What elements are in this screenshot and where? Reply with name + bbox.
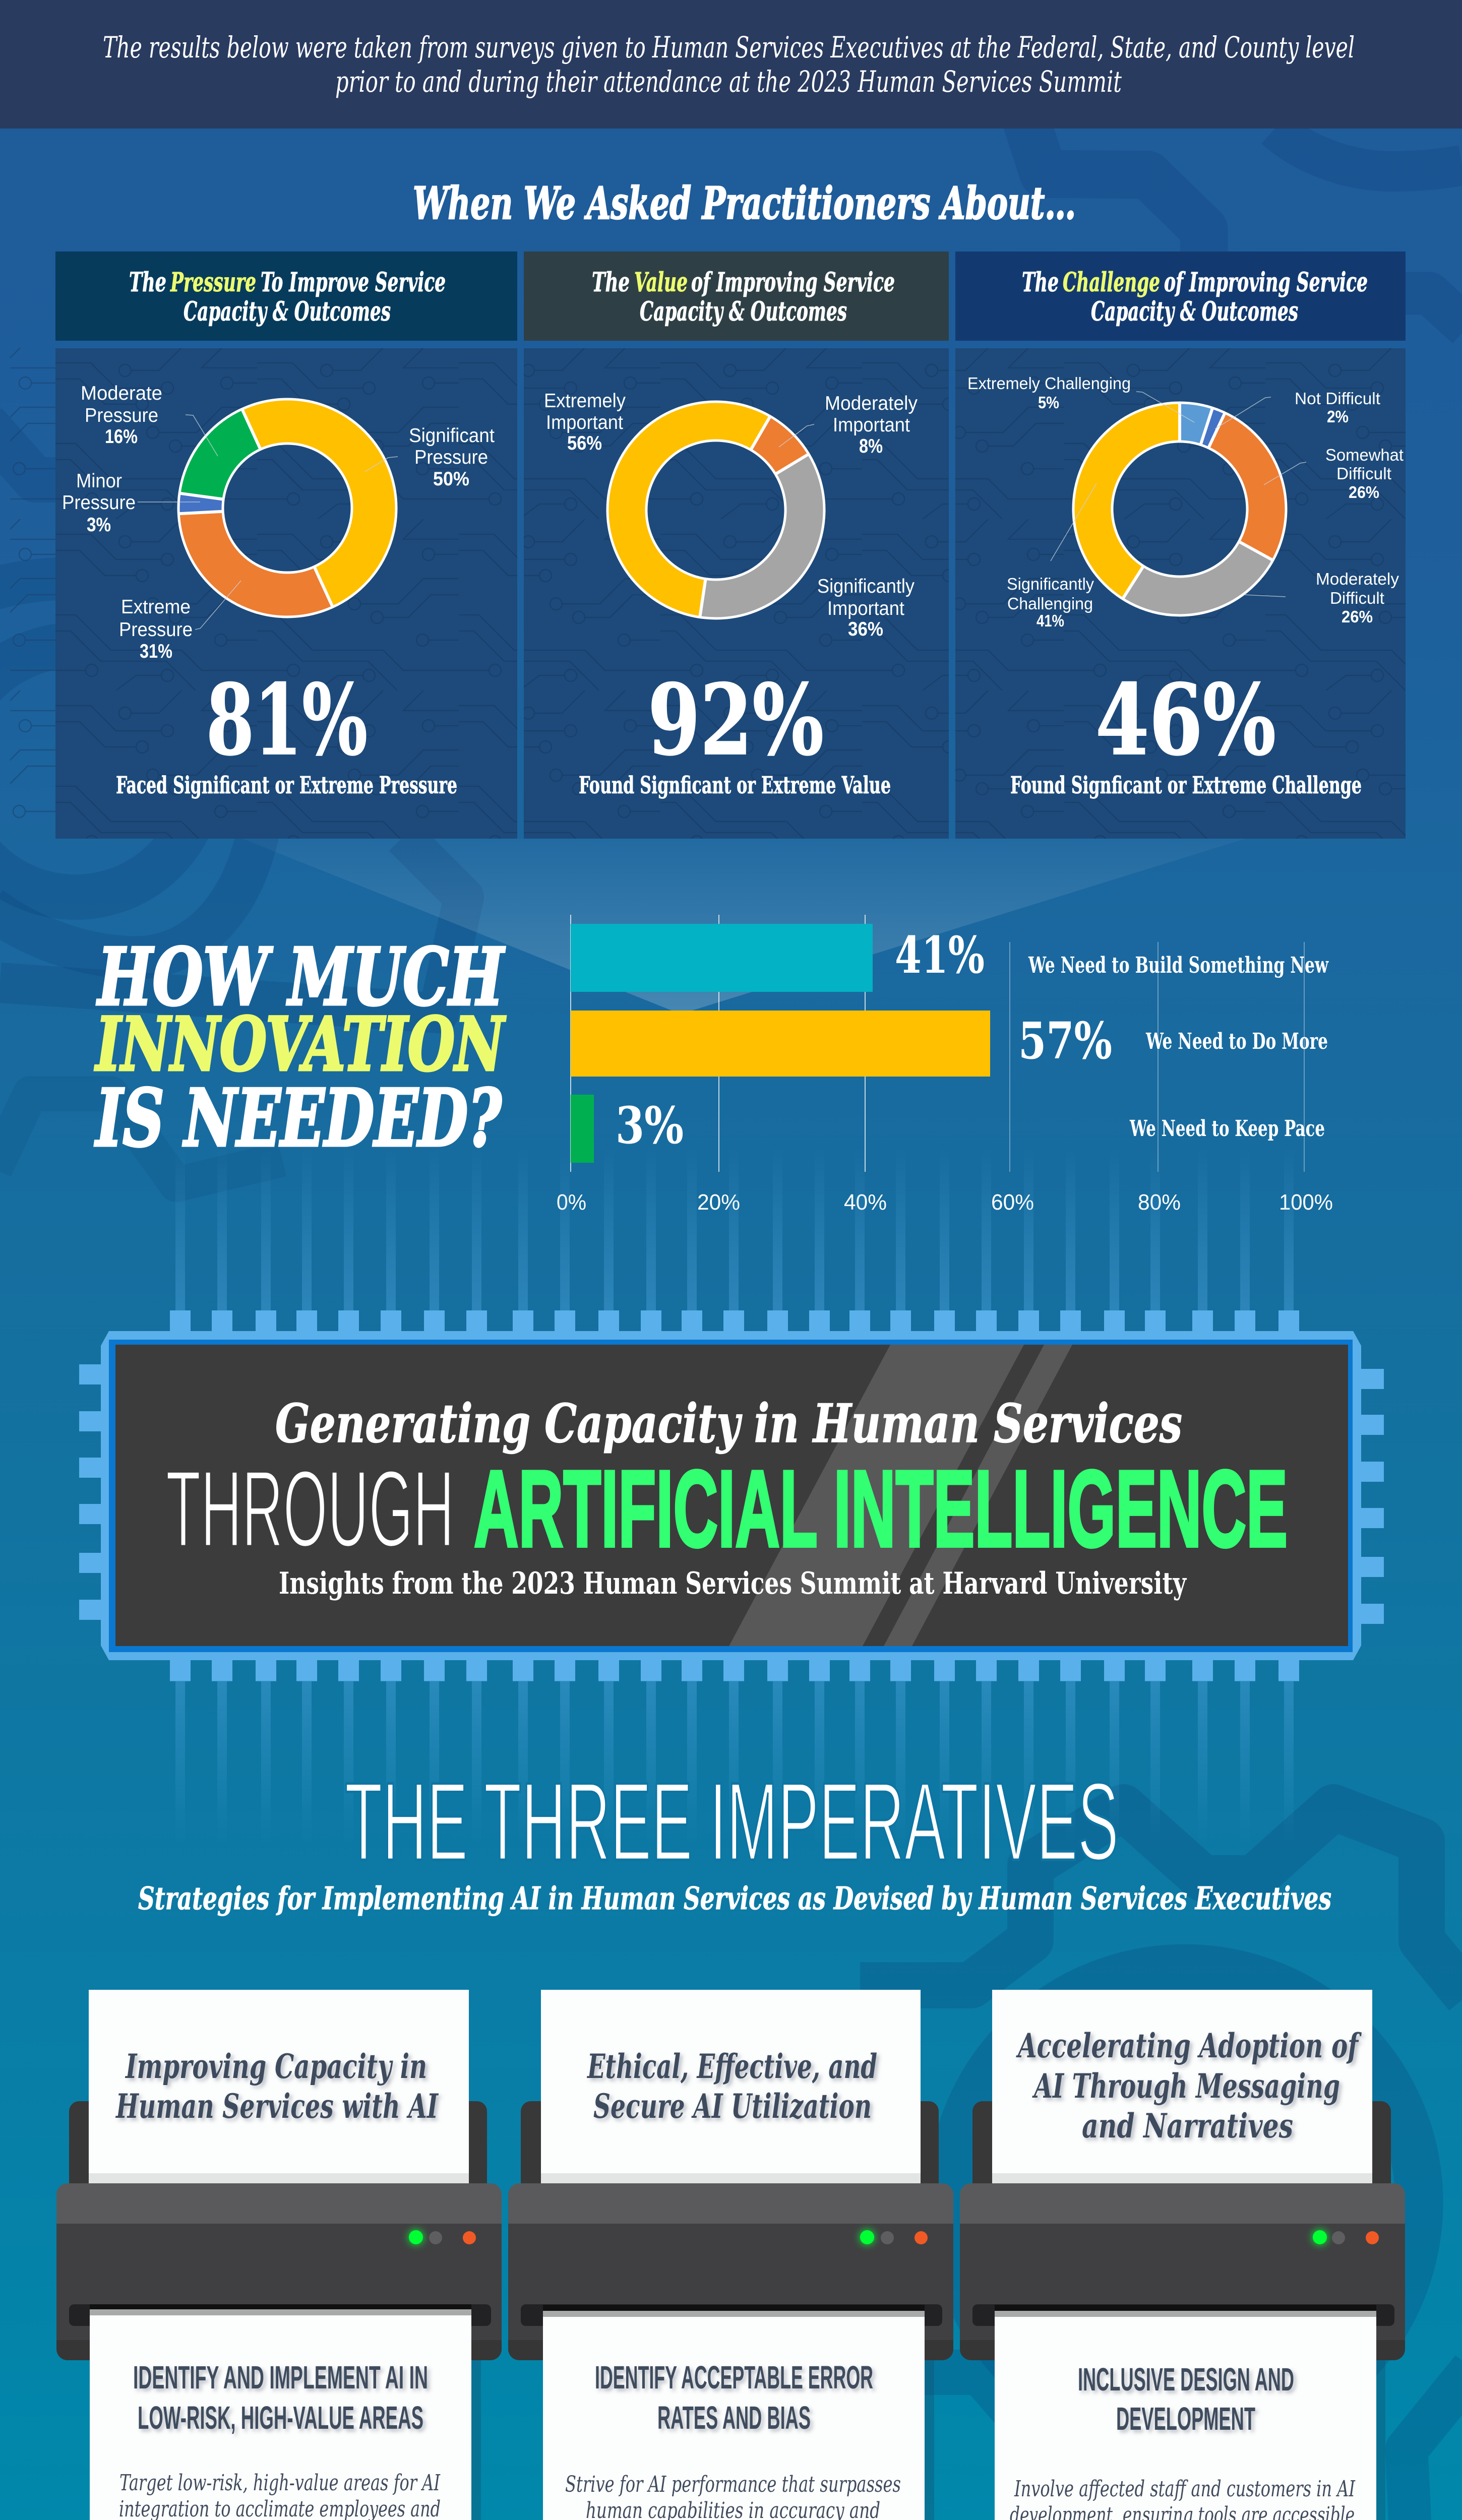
strategy: error rates: Strive for AI performance that surpasses <box>565 2472 901 2497</box>
donut labels: value: Important <box>827 598 904 619</box>
panel header: challenge: Challenge <box>1063 267 1160 298</box>
heading: how much innovation is needed <box>94 931 506 1164</box>
chip face <box>115 1345 1348 1646</box>
panel: pressure <box>55 251 517 839</box>
donut labels: pressure: 16% <box>105 426 138 448</box>
axis labels: 20% <box>697 1190 740 1215</box>
chip title lines: THROUGH <box>166 1447 454 1569</box>
donut labels: pressure: 31% <box>140 641 172 662</box>
donut labels: pressure: Pressure <box>119 619 193 641</box>
strategy: inclusive design <box>1010 2361 1360 2520</box>
strategy: error rates <box>565 2359 901 2520</box>
donut labels: pressure: Significant <box>409 425 495 447</box>
printer with input paper <box>508 1990 953 2360</box>
paper rows <box>90 2315 471 2520</box>
axis labels: 100% <box>1279 1190 1333 1215</box>
donut labels: value: 36% <box>848 618 883 640</box>
axis labels <box>557 1190 1333 1215</box>
strategy: inclusive design: DEVELOPMENT <box>1116 2401 1255 2437</box>
paper shadow <box>1000 2360 1385 2520</box>
strategy: identify low-risk areas <box>114 2359 446 2520</box>
donut labels: pressure: Pressure <box>85 405 158 426</box>
donut labels: challenge: Difficult <box>1330 589 1384 607</box>
bar: keep pace: We Need to Keep Pace <box>1129 1116 1325 1142</box>
donut labels: value: Extremely <box>544 390 626 412</box>
donut chart: value <box>594 388 838 632</box>
paper rows <box>543 2317 925 2520</box>
donut labels: pressure: Moderate <box>81 383 162 404</box>
panel header: pressure: Capacity & Outcomes <box>184 296 391 327</box>
donut labels: challenge: Somewhat <box>1325 446 1404 464</box>
paper shadow <box>96 2360 481 2520</box>
donut labels: value <box>544 390 918 640</box>
intro text <box>103 30 1355 99</box>
bar: build something new <box>571 924 1329 992</box>
bar chart: how much innovation <box>557 915 1333 1215</box>
axis labels: 60% <box>991 1190 1034 1215</box>
donut chart: pressure <box>172 393 402 623</box>
donut labels: challenge: 2% <box>1327 407 1349 426</box>
panel header: value: Value <box>634 267 688 298</box>
panel header: pressure <box>55 251 517 341</box>
title chip <box>79 1149 1384 1843</box>
panel header: pressure: To Improve Service <box>261 267 446 298</box>
printer title: Ethical, Effective, and <box>587 2047 877 2086</box>
intro text: prior to and during their attendance at the 2023 Human Services Summit <box>335 65 1122 99</box>
bar: build something new: 41% <box>895 925 985 985</box>
paper rows <box>995 2317 1376 2520</box>
donut labels: pressure: Pressure <box>62 492 136 514</box>
bar: keep pace: 3% <box>616 1096 684 1155</box>
panel header: pressure: The <box>129 267 166 298</box>
panel header: challenge: The <box>1022 267 1059 298</box>
donut labels: value: Moderately <box>825 393 918 414</box>
column 3: messaging and narratives <box>960 1990 1405 2520</box>
donut labels: challenge: Significantly <box>1007 575 1094 593</box>
chip title lines: Insights from the 2023 Human Services Summit at Harvard University <box>279 1566 1187 1601</box>
donut labels: challenge: 26% <box>1342 607 1373 626</box>
strategy: inclusive design: INCLUSIVE DESIGN AND <box>1078 2361 1294 2398</box>
donut labels: value: Important <box>833 414 910 436</box>
panel header: value: of Improving Service <box>691 267 895 298</box>
donut labels: pressure: Pressure <box>414 447 488 468</box>
donut labels: pressure: Minor <box>76 470 122 492</box>
chip title lines: Generating Capacity in Human Services <box>275 1392 1182 1455</box>
donut labels: challenge: Challenging <box>1007 594 1093 613</box>
chip connector lines fading <box>175 1149 1294 1843</box>
printer with input paper <box>960 1990 1405 2360</box>
donut labels: value: Significantly <box>817 576 915 597</box>
chip title lines <box>166 1392 1288 1601</box>
heading: how much innovation is needed: IS NEEDED? <box>94 1072 502 1164</box>
axis labels: 80% <box>1138 1190 1181 1215</box>
panel body: challenge <box>955 348 1406 839</box>
donut labels: challenge <box>967 374 1404 630</box>
strategy: identify low-risk areas: LOW-RISK, HIGH-VALUE AREAS <box>138 2400 423 2436</box>
donut labels: challenge: Not Difficult <box>1295 389 1380 408</box>
big stat: 81%: 81% <box>206 663 368 777</box>
donut labels: pressure: Extreme <box>121 596 191 618</box>
heading: how much innovation is needed: INNOVATION <box>94 1001 506 1088</box>
strategy: identify low-risk areas: IDENTIFY AND IMPLEMENT AI IN <box>133 2359 428 2396</box>
donut labels: value: 8% <box>859 435 883 457</box>
column 1: improving capacity <box>56 1990 502 2520</box>
stat caption: value: Found Signficant or Extreme Value <box>579 772 891 799</box>
strategy: error rates: IDENTIFY ACCEPTABLE ERROR <box>595 2359 873 2396</box>
bar: build something new: We Need to Build Something New <box>1028 953 1329 978</box>
panel header: pressure: Pressure <box>170 267 256 298</box>
axis labels: 0% <box>557 1190 586 1215</box>
printer title <box>1016 2026 1362 2146</box>
printer title: Human Services with AI <box>115 2087 439 2126</box>
donut labels: challenge: Extremely Challenging <box>967 374 1131 393</box>
column 2: ethical utilization <box>508 1990 953 2520</box>
strategy: identify low-risk areas: Target low-risk, high-value areas for AI <box>119 2470 441 2496</box>
donut labels: value: Important <box>546 412 623 433</box>
printer title <box>115 2047 439 2126</box>
donut labels: challenge: 5% <box>1038 393 1059 412</box>
donut labels: pressure: 3% <box>87 514 111 536</box>
donut labels: value: 56% <box>567 432 602 454</box>
panel body: pressure <box>55 348 517 839</box>
bar: do more: We Need to Do More <box>1145 1029 1328 1054</box>
stat caption: pressure: Faced Significant or Extreme Pressure <box>116 772 457 799</box>
printer with input paper <box>56 1990 502 2360</box>
bar: do more: 57% <box>1018 1011 1112 1070</box>
donut labels: challenge: 41% <box>1037 611 1064 630</box>
chip frame <box>101 1331 1361 1660</box>
bar: keep pace <box>571 1095 1325 1163</box>
printer title: Improving Capacity in <box>125 2047 427 2086</box>
light beam behind bar chart <box>242 839 1245 1014</box>
axis labels: 40% <box>844 1190 887 1215</box>
big stat: 46%: 46% <box>1095 663 1276 777</box>
panel body: value <box>524 348 949 839</box>
big stat: 92%: 92% <box>648 663 824 777</box>
printer title: and Narratives <box>1082 2106 1293 2146</box>
printer title: Secure AI Utilization <box>593 2087 872 2126</box>
printer title: AI Through Messaging <box>1032 2066 1340 2106</box>
panel header: challenge: Capacity & Outcomes <box>1091 296 1298 327</box>
section heading: when we asked: When We Asked Practitioners About… <box>413 177 1076 229</box>
panel header: value: The <box>592 267 630 298</box>
strategy: error rates: RATES AND BIAS <box>657 2400 811 2436</box>
panel: value <box>524 251 949 839</box>
panel header: value <box>524 251 949 341</box>
intro banner <box>0 0 1462 129</box>
bar: do more <box>571 1011 1328 1077</box>
panel header: challenge: of Improving Service <box>1164 267 1368 298</box>
panel header: challenge <box>955 251 1406 341</box>
donut labels: pressure: 50% <box>433 468 469 490</box>
paper shadow <box>550 2360 934 2520</box>
donut labels: pressure <box>62 383 495 662</box>
chip pins <box>79 1310 1384 1681</box>
donut chart: challenge <box>1060 389 1300 629</box>
donut labels: challenge: Difficult <box>1336 464 1391 483</box>
donut labels: challenge: Moderately <box>1316 570 1399 588</box>
donut labels: challenge: 26% <box>1349 483 1379 501</box>
heading: how much innovation is needed: HOW MUCH <box>96 931 505 1023</box>
panel: challenge <box>955 251 1406 839</box>
printer title <box>587 2047 877 2126</box>
panel header: value: Capacity & Outcomes <box>640 296 847 327</box>
